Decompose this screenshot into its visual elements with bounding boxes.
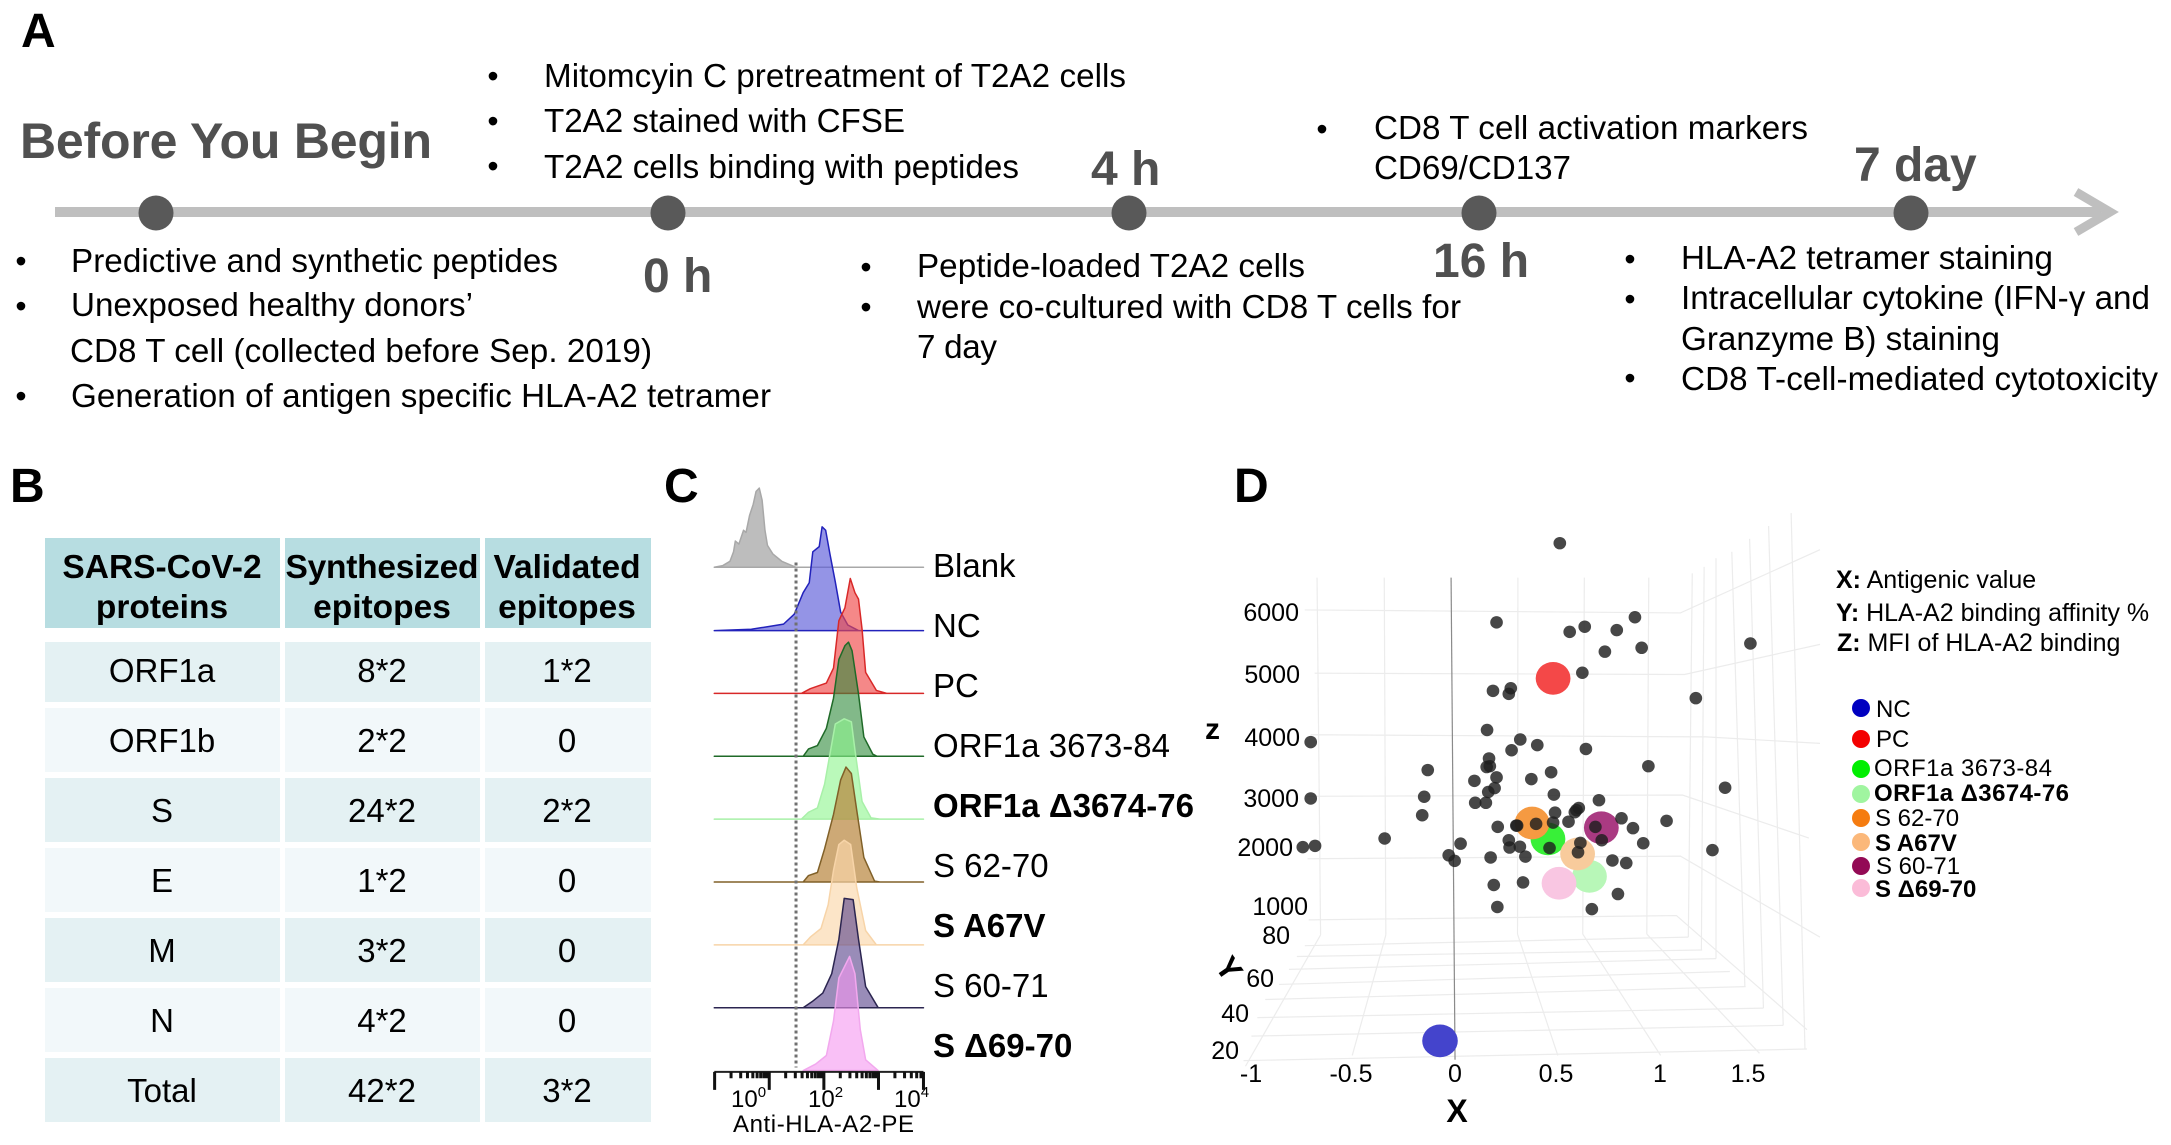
axis definitions: X: Antigenic value <box>1836 566 2036 594</box>
text block: 7 day steps: • <box>1624 281 1636 317</box>
text block: before you begin items: CD8 T cell (collected before Sep. 2019) <box>70 333 652 370</box>
y axis ticks: 40 <box>1221 1000 1249 1028</box>
text block: before you begin items: • <box>15 243 27 279</box>
table row ORF1b <box>45 708 651 772</box>
text block: before you begin items: Predictive and synthetic peptides <box>71 243 558 280</box>
histogram labels: ORF1a Δ3674-76 <box>933 787 1194 824</box>
table row S: S <box>151 792 173 829</box>
text block: 0 h steps: • <box>487 58 499 94</box>
text block: 0 h steps: T2A2 stained with CFSE <box>544 103 905 140</box>
table header: SARS-CoV-2 <box>62 549 262 586</box>
histogram ridgeline chart <box>714 488 923 1090</box>
x axis tick labels: 10 <box>731 1086 758 1113</box>
time label 4 h: 4 h <box>1091 143 1160 196</box>
text block: 4 h steps: • <box>860 249 872 285</box>
z axis ticks: 4000 <box>1244 724 1300 752</box>
z axis ticks <box>1237 599 1308 921</box>
text block: before you begin items: • <box>15 288 27 324</box>
z axis ticks: 2000 <box>1237 834 1293 862</box>
table row ORF1a: 1*2 <box>542 652 592 689</box>
panel letter C: C <box>664 460 699 513</box>
histogram labels: S A67V <box>933 907 1046 944</box>
table row M: M <box>148 932 176 969</box>
table row ORF1b: 2*2 <box>357 722 407 759</box>
text block: 7 day steps: Granzyme B) staining <box>1681 321 2000 358</box>
text block: 4 h steps: • <box>860 289 872 325</box>
axis label y: Y <box>1208 950 1250 988</box>
table row E: 0 <box>558 862 576 899</box>
panel letter D: D <box>1234 460 1269 513</box>
table row S <box>45 778 651 842</box>
text block: 7 day steps: • <box>1624 360 1636 396</box>
table row E: 1*2 <box>357 862 407 899</box>
timeline arrow <box>55 192 2110 232</box>
x axis ticks: 0 <box>1448 1060 1462 1088</box>
z axis ticks: 3000 <box>1243 785 1299 813</box>
text block: 0 h steps: • <box>487 103 499 139</box>
text block: 7 day steps: HLA-A2 tetramer staining <box>1681 240 2053 277</box>
table row total: Total <box>127 1072 197 1109</box>
x axis tick labels: 4 <box>921 1084 929 1101</box>
table row total: 3*2 <box>542 1072 592 1109</box>
table row ORF1a <box>45 642 651 702</box>
text block: 4 h steps <box>860 248 1461 366</box>
text block: 7 day steps: CD8 T-cell-mediated cytotoxicity <box>1681 361 2158 398</box>
histogram labels: PC <box>933 667 979 704</box>
text block: 0 h steps: T2A2 cells binding with peptides <box>544 149 1019 186</box>
legend: ORF1a 3673-84 <box>1874 755 2052 782</box>
x axis ticks: -0.5 <box>1329 1060 1373 1088</box>
table row S: 24*2 <box>348 792 416 829</box>
table row ORF1a: 8*2 <box>357 652 407 689</box>
panel letter A: A <box>21 5 56 58</box>
text block: 16 h steps: CD69/CD137 <box>1374 150 1571 187</box>
text block: before you begin items: Generation of antigen specific HLA-A2 tetramer <box>71 378 771 415</box>
histogram labels: S 60-71 <box>933 967 1049 1004</box>
panel letter B: B <box>10 460 45 513</box>
table row M <box>45 918 651 982</box>
legend: NC <box>1876 696 1911 723</box>
axis definitions: Y: HLA-A2 binding affinity % <box>1836 599 2149 627</box>
text block: 16 h steps: • <box>1316 111 1328 147</box>
text block: before you begin items: • <box>15 378 27 414</box>
table row N: 0 <box>558 1002 576 1039</box>
histogram labels: ORF1a 3673-84 <box>933 727 1170 764</box>
table row S: 2*2 <box>542 792 592 829</box>
table row ORF1b: 0 <box>558 722 576 759</box>
text block: 4 h steps: were co-cultured with CD8 T cells for <box>916 289 1461 326</box>
histogram labels: S Δ69-70 <box>933 1027 1072 1064</box>
axis definitions: Z: MFI of HLA-A2 binding <box>1837 629 2120 657</box>
histogram labels: S 62-70 <box>933 847 1049 884</box>
x axis ticks: 1.5 <box>1731 1060 1765 1088</box>
table header <box>45 538 651 628</box>
3D grid <box>1243 513 1820 1066</box>
text block: 0 h steps: • <box>487 148 499 184</box>
z axis ticks: 1000 <box>1252 893 1308 921</box>
axis label z: z <box>1205 713 1220 746</box>
table row N <box>45 988 651 1052</box>
table row total: 42*2 <box>348 1072 416 1109</box>
legend: S Δ69-70 <box>1875 876 1976 903</box>
x axis title: Anti-HLA-A2-PE <box>733 1111 914 1138</box>
legend: S A67V <box>1875 830 1957 857</box>
axis definitions <box>1836 566 2149 657</box>
text block: 4 h steps: Peptide-loaded T2A2 cells <box>917 248 1305 285</box>
legend: ORF1a Δ3674-76 <box>1874 780 2069 807</box>
histogram labels <box>933 547 1194 1064</box>
histogram labels: Blank <box>933 547 1016 584</box>
legend: PC <box>1876 726 1909 753</box>
histogram labels: NC <box>933 607 981 644</box>
z axis ticks: 6000 <box>1243 599 1299 627</box>
text block: 4 h steps: 7 day <box>917 329 997 366</box>
highlighted peptide points <box>1422 662 1619 1057</box>
x axis tick labels: 10 <box>808 1086 835 1113</box>
table row total <box>45 1058 651 1122</box>
legend: S 60-71 <box>1876 853 1960 880</box>
table row ORF1b: ORF1b <box>109 722 215 759</box>
y axis ticks: 80 <box>1262 922 1290 950</box>
y axis ticks <box>1211 922 1290 1065</box>
text block: 16 h steps <box>1316 110 1808 187</box>
y axis ticks: 60 <box>1246 965 1274 993</box>
axis label x: X <box>1446 1093 1468 1129</box>
x axis ticks: 1 <box>1653 1060 1667 1088</box>
panel: C histograms <box>664 460 1194 1138</box>
timeline dots <box>138 196 1928 230</box>
legend: S 62-70 <box>1875 805 1959 832</box>
panel: B table <box>10 460 651 1122</box>
x axis ticks: -1 <box>1240 1060 1262 1088</box>
table row M: 3*2 <box>357 932 407 969</box>
x axis ticks: 0.5 <box>1539 1060 1573 1088</box>
text block: 7 day steps: Intracellular cytokine (IFN-γ and <box>1681 280 2150 317</box>
scatter points <box>1296 537 1757 915</box>
table row ORF1a: ORF1a <box>109 652 216 689</box>
table row N: 4*2 <box>357 1002 407 1039</box>
text block: before you begin items: Unexposed healthy donors’ <box>71 287 473 324</box>
text block: 0 h steps <box>487 58 1126 186</box>
z axis ticks: 5000 <box>1244 661 1300 689</box>
x axis ticks <box>1240 1060 1765 1088</box>
x axis tick labels <box>731 1084 929 1113</box>
x axis tick labels: 0 <box>758 1084 766 1101</box>
text block: 16 h steps: CD8 T cell activation markers <box>1374 110 1808 147</box>
table row E: E <box>151 862 173 899</box>
legend <box>1852 696 2069 903</box>
time label 0 h: 0 h <box>643 250 712 303</box>
table header: epitopes <box>498 589 636 626</box>
text block: 7 day steps: • <box>1624 241 1636 277</box>
heading: before you begin: Before You Begin <box>20 113 432 169</box>
time label 16 h: 16 h <box>1433 235 1529 288</box>
text block: 7 day steps <box>1624 240 2158 398</box>
x axis tick labels: 10 <box>894 1086 921 1113</box>
table row M: 0 <box>558 932 576 969</box>
x axis tick labels: 2 <box>835 1084 843 1101</box>
time label 7 day: 7 day <box>1854 139 1977 192</box>
table row N: N <box>150 1002 174 1039</box>
table header: Validated <box>493 549 641 586</box>
panel: A timeline <box>15 5 2158 415</box>
table header: proteins <box>96 589 228 626</box>
table row E <box>45 848 651 912</box>
text block: before you begin items <box>15 243 771 415</box>
y axis ticks: 20 <box>1211 1037 1239 1065</box>
panel: D 3D scatter <box>1205 460 2149 1129</box>
text block: 0 h steps: Mitomcyin C pretreatment of T2A2 cells <box>544 58 1126 95</box>
table header: Synthesized <box>286 549 478 586</box>
table header: epitopes <box>313 589 451 626</box>
